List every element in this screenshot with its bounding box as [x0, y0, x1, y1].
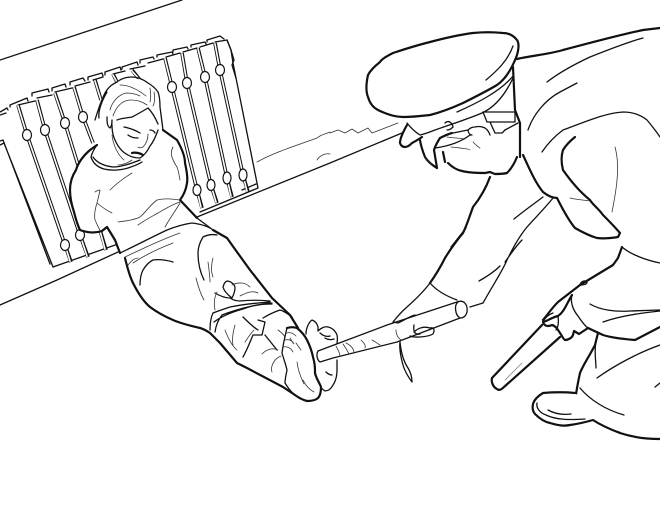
cheek lines	[425, 137, 480, 165]
hair strands	[110, 85, 155, 116]
hair	[95, 77, 163, 130]
knee crease	[580, 342, 624, 415]
shoulder fold	[612, 147, 618, 212]
fence slat gaps	[18, 44, 247, 261]
baton wrap	[336, 330, 402, 356]
arm folds	[451, 197, 553, 307]
lower back line	[543, 247, 622, 320]
trouser folds	[140, 235, 217, 285]
wall line	[0, 0, 182, 60]
lanyard	[400, 342, 412, 382]
trouser creases	[125, 233, 213, 300]
jaw	[443, 152, 517, 174]
shin creases	[225, 325, 285, 372]
nose	[138, 134, 148, 148]
fence	[0, 36, 258, 267]
foot edge	[282, 328, 295, 395]
shoulder and back	[517, 28, 660, 59]
thigh fold	[597, 345, 660, 387]
mouth	[132, 153, 143, 155]
holster clip	[580, 281, 587, 285]
ear strap	[445, 122, 453, 130]
fence slat lines	[18, 43, 248, 262]
shirt outline	[70, 130, 197, 253]
cap crown	[366, 32, 518, 117]
lower leg outline	[125, 258, 318, 401]
collar	[91, 145, 142, 170]
ground line right	[197, 133, 402, 217]
sleeve crease	[570, 198, 590, 201]
left hand	[543, 295, 588, 340]
ear	[107, 117, 112, 128]
upper leg outline	[213, 230, 298, 328]
armpit contour	[523, 137, 620, 238]
shirt hem	[120, 218, 213, 253]
rope bands	[210, 302, 272, 332]
grass line	[257, 123, 398, 162]
shoe	[533, 392, 620, 433]
face side	[420, 133, 452, 168]
eye	[435, 127, 490, 148]
neck lines	[112, 135, 132, 165]
ankle knot	[243, 310, 292, 357]
seated woman	[70, 77, 337, 401]
eyes and nose	[124, 127, 155, 138]
cap band	[407, 46, 513, 135]
back folds	[528, 38, 643, 130]
baton in officer's hand	[317, 301, 467, 382]
fence top right edge	[227, 40, 236, 78]
officer	[366, 28, 660, 439]
sleeve arc	[542, 112, 660, 152]
baton body	[317, 301, 467, 362]
left baton highlight	[505, 363, 522, 380]
body fill	[70, 77, 321, 401]
thigh	[588, 327, 660, 340]
fence board tops	[0, 40, 227, 115]
left baton	[492, 325, 560, 390]
lower leg	[575, 333, 660, 439]
fence caps	[0, 36, 224, 112]
fence knobs	[22, 64, 247, 250]
knot loop	[215, 281, 270, 301]
cap brim	[400, 125, 422, 147]
ground line left	[0, 252, 118, 305]
toes	[283, 333, 314, 392]
shoe details	[537, 403, 585, 420]
shirt folds	[95, 147, 180, 230]
back of head	[513, 67, 520, 157]
far foot	[306, 320, 337, 391]
cap badge and glasses	[483, 112, 518, 133]
belt fold	[590, 247, 660, 322]
near foot	[287, 327, 321, 398]
trouser ties	[214, 283, 258, 310]
right arm outer edge	[430, 177, 490, 283]
right hand	[393, 283, 457, 337]
fence outline	[0, 40, 258, 267]
jaw	[112, 125, 158, 158]
baton end	[456, 302, 460, 318]
hand grip lines	[543, 295, 588, 330]
